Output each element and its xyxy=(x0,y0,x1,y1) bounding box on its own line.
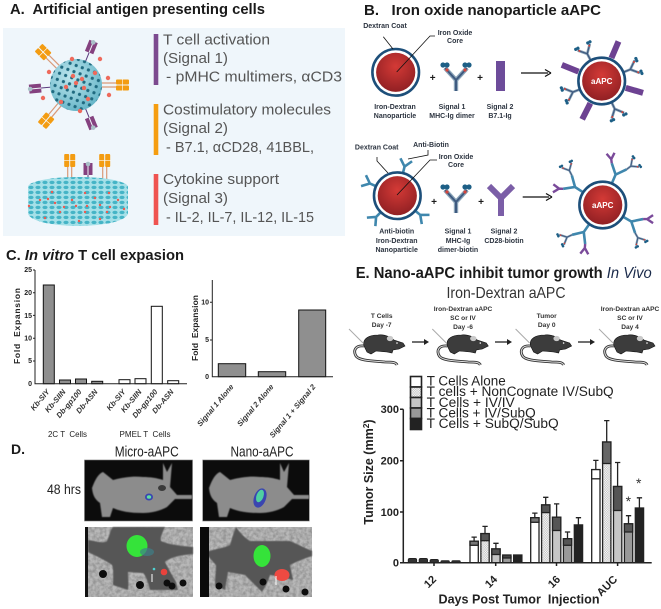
timeline: injection schedule: SC or IV xyxy=(450,315,476,322)
panel B: bottom row, anti-biotin nanoparticle: Anti-biotin xyxy=(379,229,414,236)
signal 1 text block: - pMHC multimers, αCD3 xyxy=(166,70,342,86)
chart: tumor size bars: AUC xyxy=(595,574,620,599)
chart: tumor size bars: 2 xyxy=(361,423,371,428)
icon: nanoparticle sphere xyxy=(27,39,129,131)
panel B: bottom row, anti-biotin nanoparticle: Anti-Biotin xyxy=(413,142,449,149)
chart: tumor size bars: 100 xyxy=(381,507,399,519)
chart: tumor size bars: * xyxy=(626,493,632,509)
chart: tumor size bars: 12 xyxy=(422,574,439,591)
bars: day 16 xyxy=(531,497,583,563)
signal 3 text block: - IL-2, IL-7, IL-12, IL-15 xyxy=(166,210,314,226)
panel B: bottom row, anti-biotin nanoparticle: + xyxy=(478,197,484,208)
chart: fold expansion by peptide: Kb-SIY xyxy=(29,387,52,412)
panel B: top row, iron-dextran nanoparticle: B7.1-Ig xyxy=(488,113,512,120)
panel D: imaging xyxy=(47,444,312,597)
timeline: injection schedule: Day 4 xyxy=(621,324,639,331)
timeline: injection schedule: Tumor xyxy=(537,313,557,320)
timeline: injection schedule xyxy=(349,306,660,365)
timeline: injection schedule: Day -7 xyxy=(372,322,392,329)
signal 1 text block: (Signal 1) xyxy=(163,51,228,67)
panel B: bottom row, anti-biotin nanoparticle: CD28-biotin xyxy=(484,238,524,245)
title D: D. xyxy=(11,441,25,457)
chart: tumor size bars: Days Post Tumor Injection xyxy=(438,592,600,606)
chart: tumor size bars: ) xyxy=(362,419,376,424)
panel B: top row, iron-dextran nanoparticle: Core xyxy=(447,38,463,45)
chart: fold expansion by peptide: PMEL T Cells xyxy=(120,429,170,439)
legend: T Cells + SubQ/SubQ xyxy=(427,416,559,431)
chart: fold expansion by peptide: Db-gp100 xyxy=(130,387,160,420)
title A: A. Artificial antigen presenting cells xyxy=(10,2,265,18)
image: micro-aAPC organs xyxy=(85,527,193,597)
chart: fold expansion by signal: Fold Expansion xyxy=(190,295,200,361)
image: micro-aAPC whole mouse xyxy=(84,460,192,521)
panel B: bottom row, anti-biotin nanoparticle xyxy=(355,142,661,262)
chart: fold expansion by peptide: 5 xyxy=(28,358,32,365)
chart: fold expansion by peptide: 25 xyxy=(24,267,32,274)
panel D: imaging: Micro-aAPC xyxy=(115,444,179,461)
timeline: injection schedule: T Cells xyxy=(371,313,393,320)
legend: T Cells + IV/SubQ xyxy=(427,406,536,420)
image: nano-aAPC organs xyxy=(200,527,312,597)
chart: fold expansion by signal: Signal 1 Alone xyxy=(195,382,236,428)
chart: fold expansion by peptide: Kb-SIIN xyxy=(119,387,144,414)
panel B: bottom row, anti-biotin nanoparticle: Signal 2 xyxy=(491,229,518,236)
timeline: injection schedule: Day 0 xyxy=(538,322,556,329)
chart: fold expansion by signal: 0 xyxy=(205,374,209,381)
title E: E. Nano-aAPC inhibit tumor growth In Vivo xyxy=(356,265,652,282)
legend: T Cells Alone xyxy=(427,374,506,389)
timeline: injection schedule: Iron-Dextran aAPC xyxy=(601,306,660,313)
panel B: bottom row, anti-biotin nanoparticle: Core xyxy=(448,162,464,169)
chart: fold expansion by peptide: Fold Expansion xyxy=(12,288,22,364)
bars: day 14 xyxy=(470,526,522,563)
chart: fold expansion by peptide: Kb-SIY xyxy=(105,387,128,412)
icon: aAPC particle with signal 1 and 2: aAPC xyxy=(591,77,613,86)
chart: fold expansion by peptide xyxy=(12,267,187,439)
chart: fold expansion by peptide: 20 xyxy=(24,290,32,297)
chart: fold expansion by peptide: Db-gp100 xyxy=(54,387,84,420)
legend: T cells + NonCognate IV/SubQ xyxy=(427,384,614,399)
panel B: top row, iron-dextran nanoparticle: Nanoparticle xyxy=(374,113,416,120)
timeline: injection schedule: Iron-Dextran aAPC xyxy=(434,306,493,313)
chart: tumor size bars: 0 xyxy=(393,558,399,570)
signal 3 text block: Cytokine support xyxy=(163,172,279,188)
signal 2 text block: - B7.1, αCD28, 41BBL, xyxy=(166,140,314,156)
image: nano-aAPC whole mouse xyxy=(203,460,309,521)
panel B: bottom row, anti-biotin nanoparticle: dimer-biotin xyxy=(438,247,478,254)
chart: fold expansion by peptide: Db-ASN xyxy=(74,387,100,415)
icon: hydrogel disk xyxy=(28,154,128,226)
chart: fold expansion by peptide: 2C T Cells xyxy=(48,429,87,439)
panel B: top row, iron-dextran nanoparticle: Signal 2 xyxy=(487,104,514,111)
panel B: top row, iron-dextran nanoparticle: + xyxy=(430,73,436,84)
legend xyxy=(410,374,614,431)
chart: tumor size bars xyxy=(361,404,652,606)
panel B: bottom row, anti-biotin nanoparticle: Nanoparticle xyxy=(375,247,418,254)
subtitle: iron-dextran aAPC: Iron-Dextran aAPC xyxy=(446,285,566,302)
panel A: artificial antigen presenting cells xyxy=(3,28,345,236)
signal 3 text block xyxy=(154,172,314,226)
chart: tumor size bars: 300 xyxy=(381,404,399,416)
icon: aAPC particle with signal 1 and 2 xyxy=(559,40,644,123)
panel B: top row, iron-dextran nanoparticle: MHC-Ig dimer xyxy=(429,113,475,120)
panel B: top row, iron-dextran nanoparticle: Iron Oxide xyxy=(438,30,472,37)
signal 1 text block: T cell activation xyxy=(163,33,270,49)
panel B: bottom row, anti-biotin nanoparticle: Dextran Coat xyxy=(355,145,399,152)
chart: fold expansion by signal: 10 xyxy=(201,300,209,306)
panel B: top row, iron-dextran nanoparticle: Iron-Dextran xyxy=(374,104,416,111)
chart: tumor size bars: 200 xyxy=(381,456,399,468)
chart: fold expansion by signal: Signal 1 + Signal 2 xyxy=(268,382,318,440)
chart: fold expansion by signal: 5 xyxy=(205,337,209,344)
title C: C. In vitro T cell expasion xyxy=(6,247,184,264)
chart: fold expansion by peptide: 0 xyxy=(28,381,32,388)
chart: fold expansion by signal xyxy=(190,280,333,440)
title B: B. Iron oxide nanoparticle aAPC xyxy=(364,2,601,19)
icon: aAPC particle with biotin-linked signals: aAPC xyxy=(592,201,614,210)
icon: aAPC particle with biotin-linked signals xyxy=(545,145,661,262)
chart: fold expansion by peptide: Kb-SIIN xyxy=(43,387,68,414)
chart: fold expansion by signal: Signal 2 Alone xyxy=(235,382,276,428)
timeline: injection schedule: Day -6 xyxy=(453,324,473,331)
panel B: bottom row, anti-biotin nanoparticle: Signal 1 xyxy=(445,229,472,236)
legend: T Cells + IV/IV xyxy=(427,395,515,410)
panel D: imaging: 48 hrs xyxy=(47,481,81,497)
chart: tumor size bars: 16 xyxy=(546,574,563,591)
signal 3 text block: (Signal 3) xyxy=(163,191,228,207)
panel B: top row, iron-dextran nanoparticle: Dextran Coat xyxy=(363,23,407,30)
panel B: bottom row, anti-biotin nanoparticle: MHC-Ig xyxy=(446,238,470,245)
timeline: injection schedule: SC or IV xyxy=(617,315,643,322)
panel B: bottom row, anti-biotin nanoparticle: + xyxy=(431,197,437,208)
chart: fold expansion by peptide: 10 xyxy=(24,336,32,342)
panel B: top row, iron-dextran nanoparticle: + xyxy=(477,73,483,84)
signal 2 text block xyxy=(154,103,331,156)
bars: AUC xyxy=(592,421,644,563)
chart: tumor size bars: 14 xyxy=(483,573,501,591)
panel D: imaging: Nano-aAPC xyxy=(230,444,294,461)
chart: fold expansion by peptide: Db-ASN xyxy=(150,387,176,415)
panel B: bottom row, anti-biotin nanoparticle: Iron Oxide xyxy=(439,154,473,161)
panel B: top row, iron-dextran nanoparticle: Signal 1 xyxy=(439,104,466,111)
bars: day 12 xyxy=(408,558,460,563)
signal 1 text block xyxy=(154,33,342,86)
chart: tumor size bars: Tumor Size (mm xyxy=(362,428,376,525)
chart: fold expansion by peptide: 15 xyxy=(24,313,32,320)
chart: tumor size bars: * xyxy=(636,475,642,491)
panel B: bottom row, anti-biotin nanoparticle: Iron-Dextran xyxy=(376,238,418,245)
signal 2 text block: (Signal 2) xyxy=(163,121,228,137)
panel B: top row, iron-dextran nanoparticle xyxy=(363,23,644,123)
signal 2 text block: Costimulatory molecules xyxy=(163,103,331,119)
